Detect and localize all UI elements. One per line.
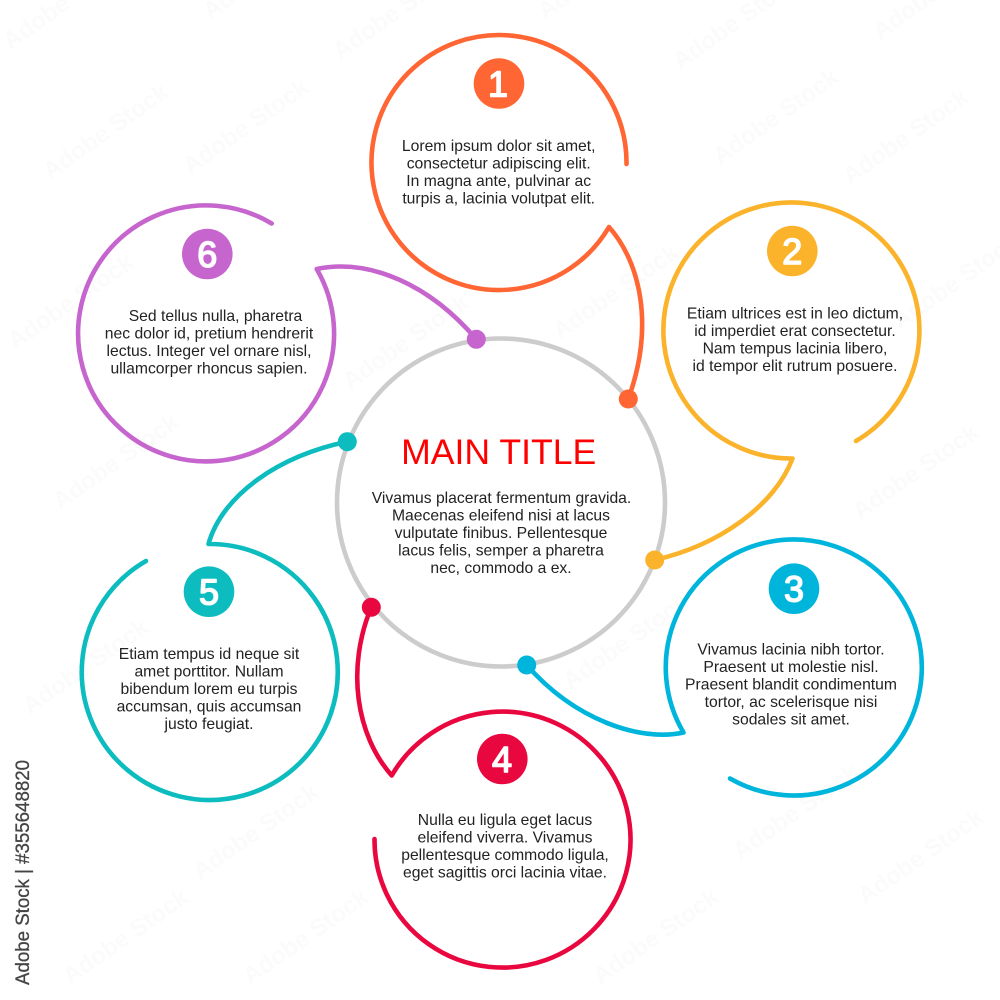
text 3: tortor, ac scelerisque nisi [705,694,877,711]
center description: vulputate finibus. Pellentesque [395,525,608,542]
text: Adobe Stock [728,758,864,865]
panel 4: red step [357,598,630,968]
badge 1: 1 [488,64,508,104]
text 6: lectus. Integer vel ornare nisl, [107,343,311,360]
text 6: nec dolor id, pretium hendrerit [105,326,314,342]
ring and tail 4 [357,607,630,968]
connector dot 6 [467,330,486,349]
text: Adobe Stock [853,803,989,910]
text: Adobe Stock [238,883,374,990]
badge 4: 4 [492,739,512,780]
ring and tail 1 [372,35,642,399]
panel 6: purple step [78,205,486,461]
badge 2: 2 [782,231,802,272]
text 5: Etiam tempus id neque sit [119,646,300,663]
text: Adobe Stock [178,73,314,180]
badge 6 [182,229,233,279]
text 5: amet porttitor. Nullam [134,664,284,680]
connector dot 5 [338,432,357,451]
center description: nec, commodo a ex. [430,560,572,577]
badge 5 [184,566,234,617]
text 3: Vivamus lacinia nibh tortor. [697,642,885,658]
panel 5: teal step [82,432,357,800]
stock credit: Adobe Stock | #355648820 [13,760,34,985]
center ring [337,338,665,666]
badge 3: 3 [784,568,804,610]
text 4: pellentesque commodo ligula, [401,847,609,864]
connector dot 3 [517,656,536,674]
text 3: sodales sit amet. [732,712,850,728]
badge 2 [767,226,818,276]
center description: Maecenas eleifend nisi at lacus [392,508,610,524]
text: Adobe Stock [708,63,844,170]
text 4: Nulla eu ligula eget lacus [418,812,592,829]
text 5: bibendum lorem eu turpis [120,681,298,698]
text: Adobe Stock [188,778,324,885]
text 5: justo feugiat. [164,716,253,733]
center description: Vivamus placerat fermentum gravida. [372,490,631,507]
text 6: ullamcorper rhoncus sapien. [110,360,308,378]
ring and tail 2 [655,203,919,560]
badge 6: 6 [197,234,217,275]
text: Adobe Stock [48,408,184,515]
center description: lacus felis, semper a pharetra [398,542,604,560]
text 3: Praesent ut molestie nisl. [703,659,879,676]
ring and tail 5 [82,442,347,800]
badge 4 [477,734,528,784]
panel 3: blue step [517,540,922,796]
text 2: id tempor elit rutrum posuere. [693,358,897,375]
center panel: main circle [337,338,665,666]
ring and tail 3 [527,540,922,796]
text 2: Nam tempus lacinia libero, [703,340,887,358]
connector dot 2 [645,550,664,570]
text 4: eleifend viverra. Vivamus [418,830,593,846]
text: Adobe Stock [848,418,984,525]
badge 1 [474,58,524,109]
badge 5: 5 [199,572,219,612]
text 1: consectetur adipiscing elit. [407,156,591,172]
text: Adobe Stock [58,883,194,990]
text 2: Etiam ultrices est in leo dictum, [687,306,903,322]
badge 3 [769,563,819,614]
text: Adobe Stock [548,238,684,345]
text 3: Praesent blandit condimentum [685,676,897,694]
text 1: In magna ante, pulvinar ac [406,173,591,190]
text 1: Lorem ipsum dolor sit amet, [402,138,595,155]
panel 1: orange step [372,35,642,409]
text: Adobe Stock [558,588,694,695]
text 5: accumsan, quis accumsan [117,698,301,716]
text 1: turpis a, lacinia volutpat elit. [402,190,595,208]
text 6: Sed tellus nulla, pharetra [129,308,303,325]
connector dot 4 [362,598,381,617]
text 2: id imperdiet erat consectetur. [694,323,896,340]
ring and tail 6 [78,205,476,461]
text: Adobe Stock [38,78,174,185]
text 4: eget sagittis orci lacinia vitae. [403,864,607,882]
connector dot 1 [619,390,638,408]
text: Adobe Stock [338,288,474,395]
title: MAIN TITLE [401,432,596,472]
text: Adobe Stock [18,613,154,720]
text: Adobe Stock [3,248,139,355]
panel 2: yellow step [645,203,919,569]
text: Adobe Stock [838,83,974,190]
text: Adobe Stock [588,883,724,990]
